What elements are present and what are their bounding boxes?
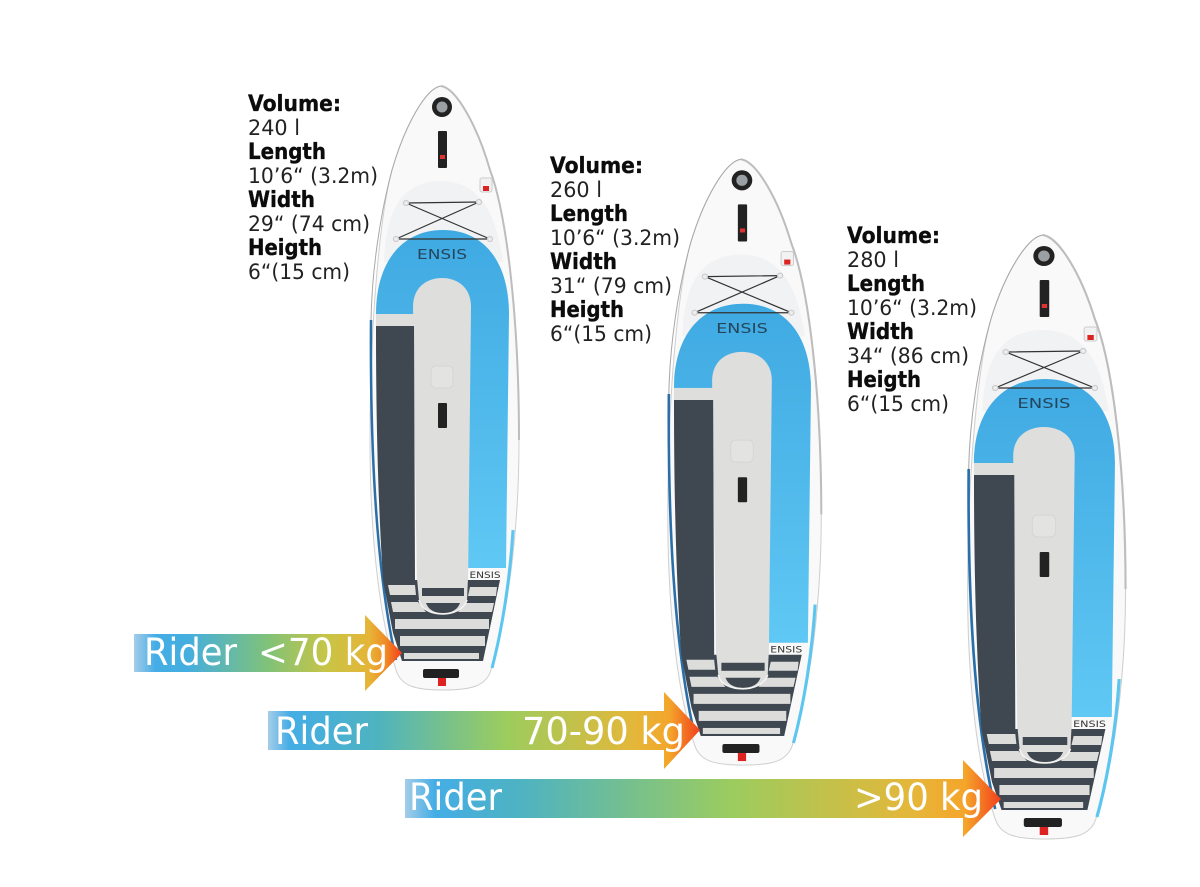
specs: 280 litre board: 10’6“ (3.2m) <box>847 296 977 320</box>
centre handle <box>738 477 747 502</box>
blue deck <box>376 230 509 568</box>
specs: 240 litre board: Length <box>248 140 326 165</box>
arrow: rider over 90 kg: Rider <box>409 776 503 819</box>
grey band <box>376 314 414 326</box>
tail logo: ENSIS <box>470 571 501 581</box>
board 2 outline <box>668 159 821 765</box>
front handle <box>438 131 447 168</box>
specs: 280 litre board: Volume: <box>847 224 940 249</box>
specs: 240 litre board <box>248 92 378 284</box>
arrow: rider under 70 kg: <70 kg <box>258 631 388 674</box>
swiss badge <box>480 178 492 192</box>
specs: 260 litre board: 6“(15 cm) <box>550 322 652 346</box>
dark side pad and tail pad <box>376 326 500 661</box>
specs: 240 litre board: 240 l <box>248 116 300 140</box>
swiss badge <box>781 252 793 266</box>
arrow: rider under 70 kg: Rider <box>144 631 238 674</box>
arrow: rider over 90 kg <box>405 760 1001 837</box>
front handle <box>1040 280 1049 317</box>
arrow: rider 70 to 90 kg <box>268 692 700 769</box>
tail stripes <box>686 653 799 734</box>
centre handle <box>1040 552 1049 577</box>
tail stripes <box>388 578 497 659</box>
specs: 280 litre board: Width <box>847 320 914 345</box>
tail handle <box>423 669 459 678</box>
specs: 280 litre board: 34“ (86 cm) <box>847 344 969 368</box>
logo: ENSIS <box>1017 397 1070 412</box>
tail handle <box>722 744 759 753</box>
specs: 240 litre board: Heigth <box>248 236 322 261</box>
tail logo: ENSIS <box>770 646 802 656</box>
board 1: 240 litre paddle board <box>370 86 519 690</box>
bungee cords <box>993 348 1097 390</box>
arrow: rider 70 to 90 kg: 70-90 kg <box>522 710 685 753</box>
blue deck <box>674 304 811 643</box>
front handle <box>738 204 747 242</box>
dark side pad and tail pad <box>674 400 802 736</box>
specs: 260 litre board: 260 l <box>550 178 602 202</box>
board 3: 280 litre paddle board <box>968 235 1126 839</box>
specs: 260 litre board: Length <box>550 202 628 227</box>
specs: 280 litre board <box>847 224 977 416</box>
arrow: rider 70 to 90 kg: Rider <box>275 710 369 753</box>
grey centre deck <box>413 278 471 590</box>
centre pad <box>1032 515 1056 537</box>
specs: 240 litre board: 29“ (74 cm) <box>248 212 370 236</box>
tail logo: ENSIS <box>1073 719 1106 730</box>
specs: 280 litre board: 6“(15 cm) <box>847 392 949 416</box>
specs: 280 litre board: Heigth <box>847 368 921 393</box>
specs: 280 litre board: 280 l <box>847 248 899 272</box>
grey band <box>674 388 713 400</box>
specs: 240 litre board: 10’6“ (3.2m) <box>248 164 378 188</box>
grey band <box>974 463 1014 475</box>
logo: ENSIS <box>716 322 768 337</box>
tail handle <box>1024 818 1062 827</box>
bungee cords <box>394 200 492 242</box>
grey centre deck <box>1013 427 1075 739</box>
specs: 240 litre board: 6“(15 cm) <box>248 260 350 284</box>
specs: 260 litre board: 31“ (79 cm) <box>550 274 672 298</box>
arrow: rider over 90 kg: >90 kg <box>854 776 983 819</box>
board 1 outline <box>370 86 519 690</box>
specs: 260 litre board: Heigth <box>550 298 624 323</box>
specs: 280 litre board: Length <box>847 272 925 297</box>
logo: ENSIS <box>417 248 467 263</box>
board 3 outline <box>968 235 1126 839</box>
centre pad <box>731 440 753 462</box>
blue deck <box>974 379 1115 717</box>
centre pad <box>431 366 453 388</box>
board 2: 260 litre paddle board <box>668 159 821 765</box>
arrow: rider under 70 kg <box>134 615 402 691</box>
dark side pad and tail pad <box>974 475 1105 810</box>
bungee cords <box>692 273 794 315</box>
specs: 240 litre board: Width <box>248 188 315 213</box>
specs: 260 litre board: 10’6“ (3.2m) <box>550 226 680 250</box>
nose valve <box>732 170 752 190</box>
swiss badge <box>1084 327 1097 341</box>
nose valve <box>1033 246 1055 266</box>
specs: 240 litre board: Volume: <box>248 92 341 117</box>
specs: 260 litre board <box>550 154 680 346</box>
nose valve <box>432 97 452 117</box>
specs: 260 litre board: Width <box>550 250 617 275</box>
tail stripes <box>987 727 1102 808</box>
specs: 260 litre board: Volume: <box>550 154 643 179</box>
centre handle <box>438 403 447 428</box>
grey centre deck <box>712 352 772 665</box>
